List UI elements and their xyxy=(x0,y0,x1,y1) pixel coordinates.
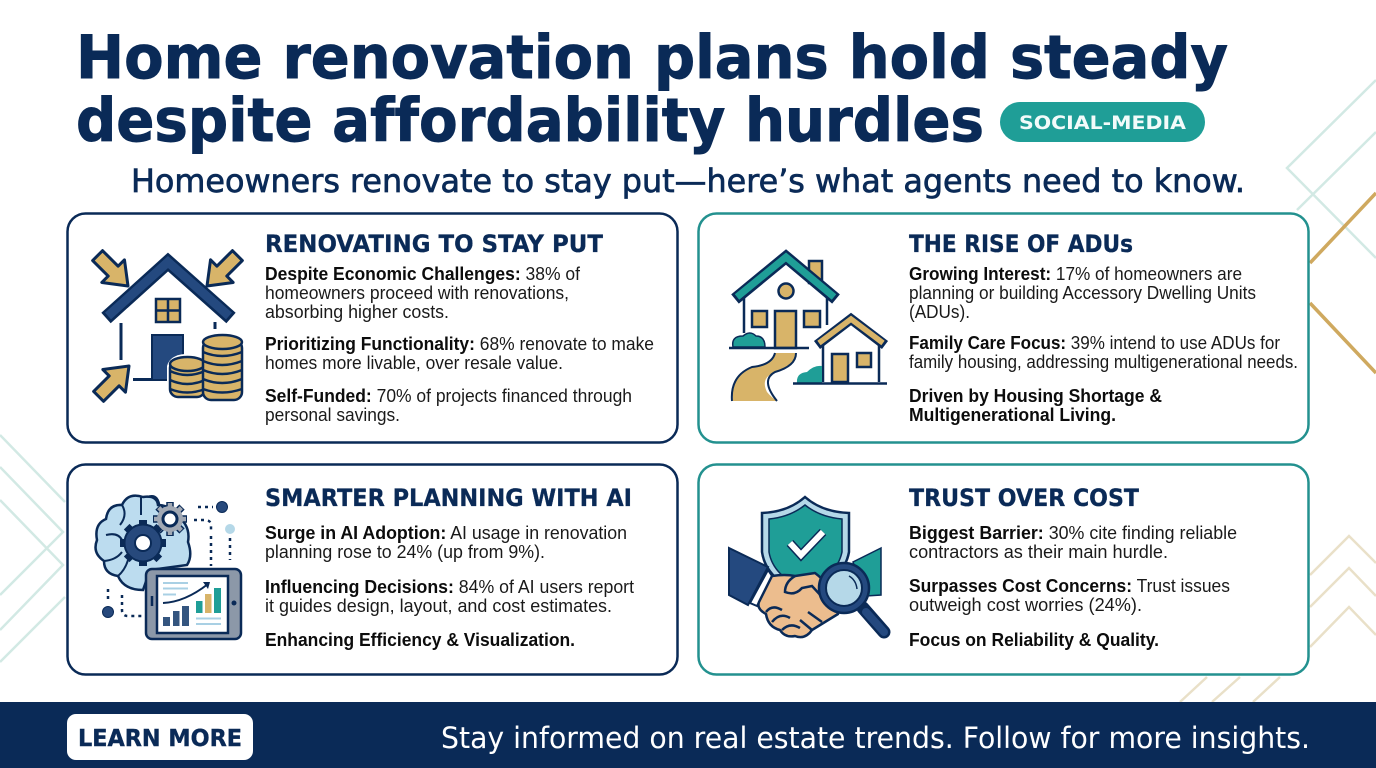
footer bar xyxy=(0,702,1376,768)
body text: homeowners proceed with renovations, xyxy=(265,283,569,303)
title: Home renovation plans hold steady xyxy=(76,23,1228,93)
body text xyxy=(265,523,634,650)
body text: Multigenerational Living. xyxy=(909,405,1116,425)
body text: Family Care Focus: 39% intend to use ADUs for xyxy=(909,333,1280,353)
body text: Surpasses Cost Concerns: Trust issues xyxy=(909,576,1230,596)
icon: main house and ADU xyxy=(729,257,887,401)
icon: arrow top right xyxy=(196,244,249,297)
heading: SMARTER PLANNING WITH AI xyxy=(265,484,632,512)
title xyxy=(76,23,1228,156)
icon: arrow top left xyxy=(86,244,139,297)
body text: Self-Funded: 70% of projects financed through xyxy=(265,386,632,406)
panel: trust over cost xyxy=(698,464,1308,674)
body text: (ADUs). xyxy=(909,302,970,322)
heading: TRUST OVER COST xyxy=(909,484,1140,512)
body text: family housing, addressing multigenerational needs. xyxy=(909,352,1298,372)
heading: THE RISE OF ADUs xyxy=(909,230,1133,258)
body text: Enhancing Efficiency & Visualization. xyxy=(265,630,575,650)
icon: brain, gears and tablet xyxy=(96,496,241,639)
icon: shield, handshake and magnifier xyxy=(729,497,884,637)
body text: Despite Economic Challenges: 38% of xyxy=(265,264,581,284)
icon: arrow bottom left xyxy=(87,355,140,408)
heading: RENOVATING TO STAY PUT xyxy=(265,230,604,258)
tag pill: social-media: SOCIAL-MEDIA xyxy=(1019,112,1186,134)
body text: outweigh cost worries (24%). xyxy=(909,595,1142,615)
button: learn more: LEARN MORE xyxy=(78,726,242,752)
panel: smarter planning with AI xyxy=(68,464,678,674)
body text: Focus on Reliability & Quality. xyxy=(909,630,1159,650)
body text: contractors as their main hurdle. xyxy=(909,542,1168,562)
icon: house with arrows and coins xyxy=(86,244,249,408)
panel: renovating to stay put xyxy=(68,214,678,442)
body text xyxy=(265,264,654,425)
body text: Biggest Barrier: 30% cite finding reliable xyxy=(909,523,1237,543)
panel: the rise of ADUs xyxy=(698,214,1308,442)
body text: it guides design, layout, and cost estimates. xyxy=(265,596,612,616)
body text xyxy=(909,523,1237,650)
footer call to action: Stay informed on real estate trends. Follow for more insights. xyxy=(441,721,1310,755)
body text: absorbing higher costs. xyxy=(265,302,449,322)
subtitle: Homeowners renovate to stay put—here’s what agents need to know. xyxy=(131,162,1245,200)
body text xyxy=(909,264,1298,425)
tag pill: social-media xyxy=(1000,102,1205,142)
body text: homes more livable, over resale value. xyxy=(265,353,563,373)
body text: Influencing Decisions: 84% of AI users report xyxy=(265,577,634,597)
body text: Driven by Housing Shortage & xyxy=(909,386,1162,406)
body text: Prioritizing Functionality: 68% renovate to make xyxy=(265,334,654,354)
body text: personal savings. xyxy=(265,405,400,425)
button: learn more xyxy=(67,714,253,760)
body text: planning rose to 24% (up from 9%). xyxy=(265,542,545,562)
title: despite affordability hurdles xyxy=(76,86,984,156)
body text: planning or building Accessory Dwelling Units xyxy=(909,283,1256,303)
body text: Surge in AI Adoption: AI usage in renovation xyxy=(265,523,627,543)
body text: Growing Interest: 17% of homeowners are xyxy=(909,264,1242,284)
